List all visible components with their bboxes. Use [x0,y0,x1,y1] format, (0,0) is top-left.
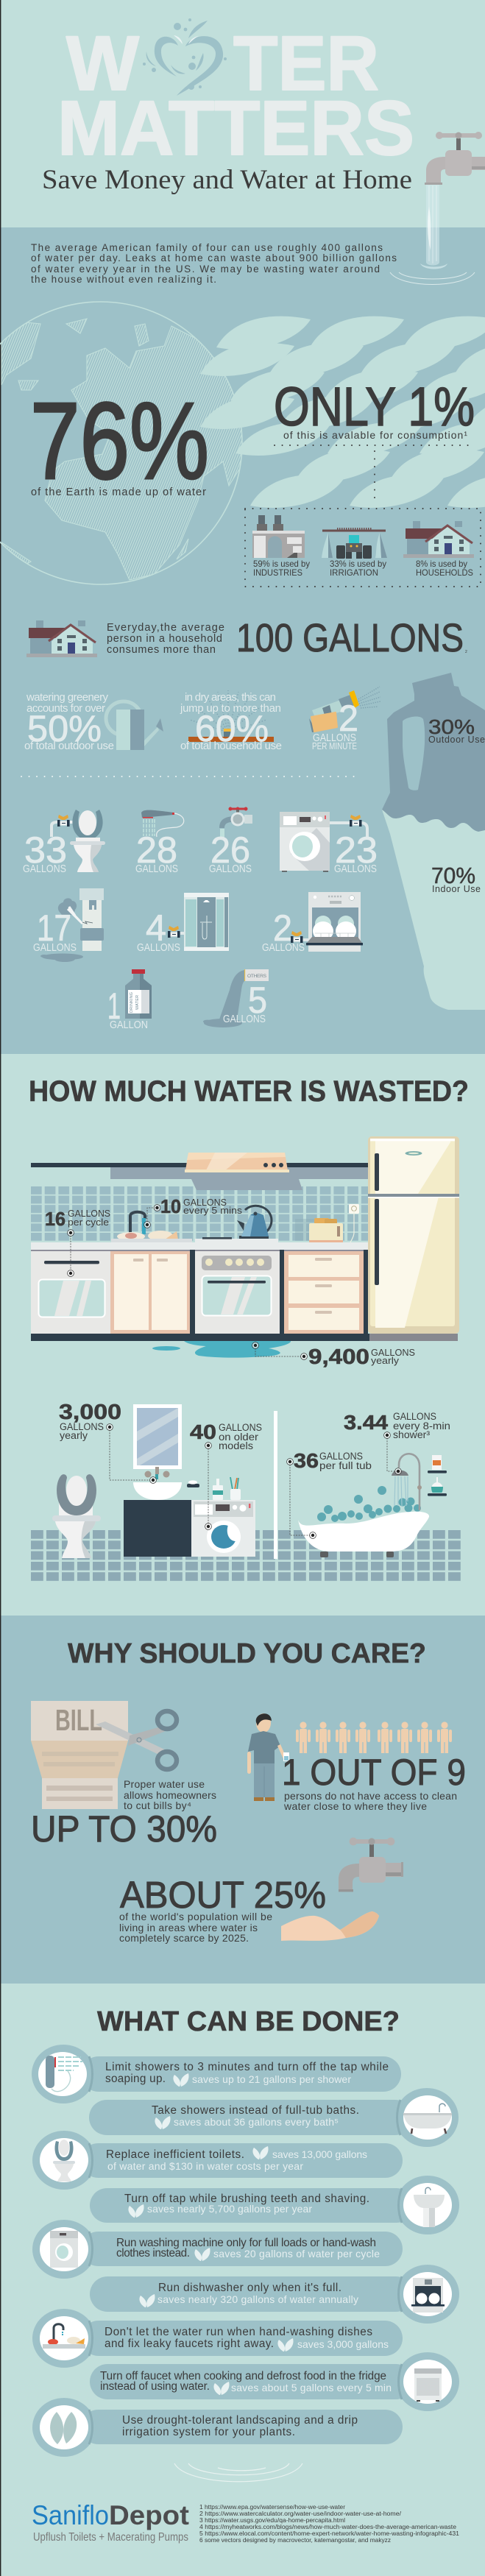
icon: watering can [106,701,163,750]
text: proper water use: to cut bills by⁴ [124,1800,191,1811]
label: 70% indoor use: Indoor Use [432,884,481,894]
text: everyday consumption: consumes more than [107,644,216,656]
heading: what can be done: WHAT CAN BE DONE? [97,2006,400,2037]
statistic: 60% dry areas: jump up to more than [180,702,281,715]
callout: leak 9,400 gallons [252,1342,415,1369]
callout: dishwasher 16 gallons: GALLONS [68,1208,110,1219]
callout: dishwasher 16 gallons [45,1208,110,1276]
tip 8: turn off faucet when cooking [90,2352,459,2411]
sink and faucet [111,1212,192,1242]
statistic: 33 gallons: GALLONS [23,863,66,875]
statistic: 5 gallons: 5 [248,980,267,1021]
icon: toilet with valve [52,810,105,872]
logo: SanifloDepot: Upflush Toilets + Macerating Pumps [33,2531,188,2544]
icon: water heart [143,18,227,96]
statistic: 2 gallons per minute: 2 [339,698,358,739]
statistic: 2 gallons per minute: GALLONS [313,732,356,744]
tip 5: washing machine [32,2220,403,2279]
statistic: 60% dry areas: in dry areas, this can [185,691,276,704]
statistic: 60% dry areas: of total household use [180,740,282,752]
tip 9: drought-tolerant landscaping [32,2398,403,2457]
icon: stove [403,2360,452,2404]
callout: sink 3,000 gallons [59,1401,156,1483]
callout: washer 40 gallons: models [219,1440,253,1451]
background: mid-teal panel, intro and statistics [0,227,485,1054]
tip 7: hand-washing dishes: Don't let the water run when hand-washing dishes [105,2326,372,2338]
label: industries: INDUSTRIES [253,567,302,578]
statistic: 50% outdoor: accounts for over [26,702,105,715]
tip 2: take showers: saves about 36 gallons every bath⁵ [174,2116,339,2128]
statistic: about 25%: ABOUT 25% [120,1874,326,1916]
callout: leak 9,400 gallons: GALLONS [371,1347,415,1358]
statistic: 33 gallons: 33 [24,829,67,871]
icons: eight people [296,1722,452,1753]
icon: pedestal sink [403,2183,452,2227]
tip 9: drought-tolerant landscaping: irrigation system for your plants. [122,2426,295,2438]
tip 3: replace toilets: of water and $130 in water costs per year [107,2160,303,2172]
heading: how much water is wasted: HOW MUCH WATER IS WASTED? [29,1075,469,1108]
logo: SanifloDepot: Depot [109,2500,189,2530]
label: households: HOUSEHOLDS [416,567,473,578]
drawers [284,1251,364,1334]
illustration: kitchen [31,1136,459,1358]
intro paragraph: the house without even realizing it. [31,274,216,285]
icon: drinking water bottle: DRINKING [130,992,134,1013]
label: households [416,559,473,578]
dotted connectors and use-breakdown frame [245,445,481,587]
statistic: 76%: of the Earth is made up of water [31,486,206,498]
dotted divider [21,776,359,777]
statistic: about 25%: living in areas where water is [119,1922,258,1933]
callout: tub 36 gallons: per full tub [319,1460,372,1471]
illustration: sketched globe [0,302,243,584]
title [57,21,414,171]
callout: shower 3.44 gallons: shower³ [393,1429,431,1440]
title: TER [233,21,379,107]
references: 1 https://www.epa.gov/watersense/how-we-use-water [199,2504,345,2510]
statistic: only 1%: of this is avalable for consumption¹ [283,429,467,441]
tip 5: washing machine: Run washing machine only for full loads or hand-wash [116,2237,376,2249]
tip 5: washing machine: clothes instead. [116,2247,190,2260]
icon: household house [403,521,474,558]
callout: shower 3.44 gallons: GALLONS [393,1411,436,1422]
icon: bill and scissors: BILL [55,1703,102,1737]
mirror and sink [133,1404,199,1500]
shower [392,1454,422,1510]
title: W [66,21,139,107]
bathtub with bubbles [298,1486,429,1557]
callout: faucet 10 gallons: 10 [160,1195,181,1217]
callout: faucet 10 gallons: GALLONS [183,1197,227,1208]
fridge [368,1136,459,1334]
tip 3: replace toilets [32,2131,403,2190]
stove and kettle [195,1206,278,1242]
statistic: 1 out of 9 [282,1752,466,1812]
statistic: about 25%: of the world's population will be [119,1911,272,1922]
divider [274,1411,277,1559]
sink cabinet [110,1251,190,1334]
icon: faucet with running water [390,132,485,284]
tip 4: turn off tap [90,2176,459,2234]
statistic: 50% outdoor [24,691,114,752]
tip 1: limit showers: Limit showers to 3 minutes and turn off the tap while [105,2061,389,2073]
oven [195,1251,280,1334]
icon: washing machine with valve [280,812,367,872]
vanity cabinet [124,1500,191,1557]
background: stylised water waves [200,316,485,508]
callout: sink 3,000 gallons: GALLONS [60,1421,104,1432]
tip 6: dishwasher [90,2265,459,2324]
icon: factory [252,515,305,558]
label: 30% outdoor use [428,715,485,745]
callout: sink 3,000 gallons: yearly [60,1430,88,1441]
callout: shower 3.44 gallons [344,1411,450,1474]
statistic: 60% dry areas [180,691,282,752]
statistic: 50% outdoor: watering greenery [26,691,109,704]
text: proper water use [124,1778,216,1811]
label: irrigation: 33% is used by [330,559,386,569]
statistic: 50% outdoor: 50% [27,708,102,749]
statistic: 5 gallons: GALLONS [223,1013,266,1025]
statistic: 2 gallons per minute [312,698,358,751]
statistic: 4 gallons: GALLONS [137,941,180,954]
icon: faucet dripping into hand [281,1838,403,1941]
statistic: 1 gallon: GALLON [110,1019,148,1031]
tip 7: hand-washing dishes: saves 3,000 gallons [297,2338,389,2350]
icon: washing machine [40,2227,88,2271]
tip 2: take showers [89,2088,459,2147]
callout: washer 40 gallons: on older [219,1432,259,1443]
callout: leak 9,400 gallons: yearly [371,1355,400,1366]
statistic: 2 gallons per minute: PER MINUTE [312,740,357,751]
illustration: water jug 30 / 70 split [382,673,485,1010]
subtitle: Save Money and Water at Home [42,165,412,195]
icon: faucet [219,807,252,839]
references: 5 https://www.elocal.com/content/home-expert-network/water-home-wasting-infographic-431 [199,2530,460,2537]
statistic: 1 out of 9: 1 OUT OF 9 [282,1752,466,1793]
text: everyday consumption [107,622,224,656]
label: households: 8% is used by [416,559,467,569]
icon: shower [38,2052,87,2096]
statistic: 50% outdoor: of total outdoor use [24,740,114,752]
text: everyday consumption: person in a household [107,633,222,645]
label: 30% outdoor use: Outdoor Use [428,735,485,745]
tip 1: limit showers: soaping up. [105,2073,166,2085]
icon: drinking water bottle [125,969,152,1019]
statistic: 60% dry areas: 60% [195,708,269,749]
statistic: 5 gallons [223,980,267,1025]
icon: toilet [40,2138,88,2182]
icon: garden sprinkler [188,690,274,742]
statistic: 1 gallon [107,986,148,1031]
callout: tub 36 gallons: GALLONS [319,1451,363,1462]
label: irrigation: IRRIGATION [330,567,378,578]
icon: dishwasher [403,2272,452,2316]
tip 8: turn off faucet when cooking: Turn off faucet when cooking and defrost food in the fridge [100,2370,386,2382]
callout: shower 3.44 gallons: 3.44 [344,1411,388,1434]
icon: hand holding hose [309,687,380,732]
icon: drinking water bottle: WATER [135,995,140,1010]
label: industries [253,559,310,578]
text: proper water use: Proper water use [124,1778,205,1790]
statistic: 1 out of 9: water close to where they live [283,1800,427,1812]
background: mid-teal panel, why should you care [0,1616,485,1984]
statistic: 17 gallons: GALLONS [33,941,77,954]
callout: dishwasher 16 gallons: per cycle [68,1217,109,1228]
tip 5: washing machine: saves 20 gallons of water per cycle [213,2248,380,2260]
statistic: 28 gallons: 28 [136,829,177,871]
statistic: 76%: 76% [30,381,209,502]
callout: dishwasher 16 gallons: 16 [45,1208,66,1230]
statistic: 1 out of 9: persons do not have access to clean [284,1790,457,1802]
callout: shower 3.44 gallons: every 8-min [393,1420,450,1432]
left edge line [0,0,1,2576]
references: 4 https://myheatworks.com/blogs/news/how-much-water-does-the-average-american-waste [199,2524,457,2530]
statistic: 2 gallons [262,907,305,954]
washing machine [191,1500,255,1557]
heading: why should you care: WHY SHOULD YOU CARE? [68,1638,426,1669]
toilet [52,1474,101,1558]
references: 2 https://www.watercalculator.org/water-use/indoor-water-use-at-home/ [199,2510,402,2517]
icon: leaves [40,2405,88,2449]
statistic: 2 gallons: 2 [273,907,292,949]
illustration: bathroom [31,1404,461,1582]
icon: irrigation tractor [322,529,387,559]
dishwasher cabinet [31,1251,110,1334]
tip 8: turn off faucet when cooking: instead of using water. [100,2380,210,2393]
tip 8: turn off faucet when cooking: saves about 5 gallons every 5 min [231,2382,392,2393]
statistic: 26 gallons: GALLONS [209,863,252,875]
icon: others pouring water [203,969,269,1027]
callout: tub 36 gallons: 36 [294,1449,319,1472]
statistic: 23 gallons: 23 [335,829,378,871]
statistic: 100 gallons: 2 [465,650,467,654]
icon: house [26,620,97,657]
statistic: 1 gallon: 1 [107,986,121,1027]
callout: faucet 10 gallons [144,1195,243,1228]
icon: bill and scissors [31,1701,177,1809]
statistic: 26 gallons: 26 [210,829,250,871]
label: 30% outdoor use: 30% [428,715,475,738]
callout: leak 9,400 gallons: 9,400 [308,1345,369,1369]
toaster and socket [295,1204,359,1242]
icon: shower head [141,810,184,837]
callout: washer 40 gallons: 40 [190,1420,216,1443]
tip 1: limit showers: saves up to 21 gallons per shower [192,2073,351,2085]
callout: sink 3,000 gallons: 3,000 [59,1401,121,1424]
statistic: 2 gallons: GALLONS [262,941,305,954]
logo: SanifloDepot: Saniflo [32,2500,109,2530]
text: everyday consumption: Everyday,the average [107,622,224,634]
label: 70% indoor use: 70% [431,863,475,888]
references: 6 some vectors designed by macrovector, katemangostar, and makyzz [199,2537,391,2544]
tip 7: hand-washing dishes [32,2309,403,2368]
tip 1: limit showers [32,2045,401,2103]
icon: dishwasher with valve [291,892,363,952]
references: 3 https://water.usgs.gov/edu/qa-home-percapita.html [199,2517,345,2524]
statistic: 28 gallons: GALLONS [135,863,178,875]
tip 6: dishwasher: saves nearly 320 gallons of water annually [157,2293,358,2305]
callout: washer 40 gallons: GALLONS [219,1422,262,1433]
icon: bathtub [403,2095,452,2140]
label: industries: 59% is used by [253,559,310,569]
statistic: 23 gallons: GALLONS [334,863,377,875]
text: proper water use: allows homeowners [124,1789,216,1801]
icon: others pouring water: OTHERS [247,974,267,979]
statistic: 4 gallons [137,907,180,954]
tip 4: turn off tap: Turn off tap while brushing teeth and shaving. [124,2193,369,2205]
intro paragraph: The average American family of four can use roughly 400 gallons [31,242,383,253]
references [199,2504,460,2544]
water puddle [152,1341,291,1358]
decoration: ripple [174,2463,302,2482]
logo: SanifloDepot [32,2500,189,2544]
tip 3: replace toilets: Replace inefficient toilets. [106,2148,244,2161]
title: MATTERS [57,85,414,171]
statistic: 17 gallons: 17 [37,907,71,949]
icon: person with glass [247,1713,289,1801]
statistic: about 25% [119,1874,326,1944]
statistic: about 25%: completely scarce by 2025. [119,1932,249,1944]
label: irrigation [330,559,386,578]
intro paragraph: of water per day. Leaks at home can waste about 900 billion gallons [31,252,397,263]
tip 7: hand-washing dishes: and fix leaky faucets right away. [105,2338,274,2350]
callout: faucet 10 gallons: every 5 mins [183,1205,243,1216]
tip 4: turn off tap: saves nearly 5,700 gallons per year [147,2203,312,2215]
statistic: 4 gallons: 4 [146,907,166,949]
shelves [428,1455,447,1496]
callout: washer 40 gallons [190,1420,262,1529]
icon: leaking pipe [40,888,104,962]
soap and toothbrushes [213,1477,241,1500]
intro paragraph: of water every year in the US. We may be wasting water around [31,263,380,275]
tip 3: replace toilets: saves 13,000 gallons [272,2148,367,2160]
statistic: up to 30%: UP TO 30% [31,1808,217,1850]
tip 6: dishwasher: Run dishwasher only when it's full. [158,2282,341,2294]
tip 9: drought-tolerant landscaping: Use drought-tolerant landscaping and a drip [122,2414,358,2427]
icon: shower cabin with valve [168,893,229,951]
callout: tub 36 gallons [287,1449,372,1538]
tip 2: take showers: Take showers instead of full-tub baths. [152,2104,359,2117]
intro paragraph [31,242,397,285]
icon: sink and dishes [40,2316,88,2360]
